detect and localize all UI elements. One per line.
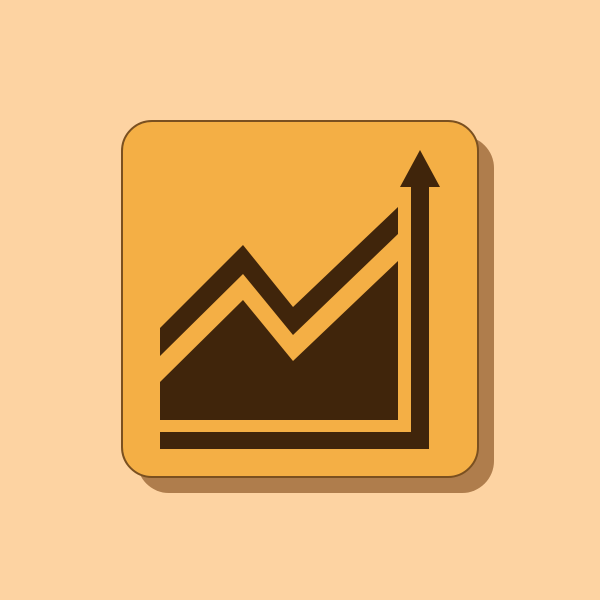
button shadow <box>137 136 494 493</box>
chart area <box>160 261 398 420</box>
button square <box>122 121 478 477</box>
axis with arrow <box>160 150 440 449</box>
chart line band <box>160 207 398 356</box>
